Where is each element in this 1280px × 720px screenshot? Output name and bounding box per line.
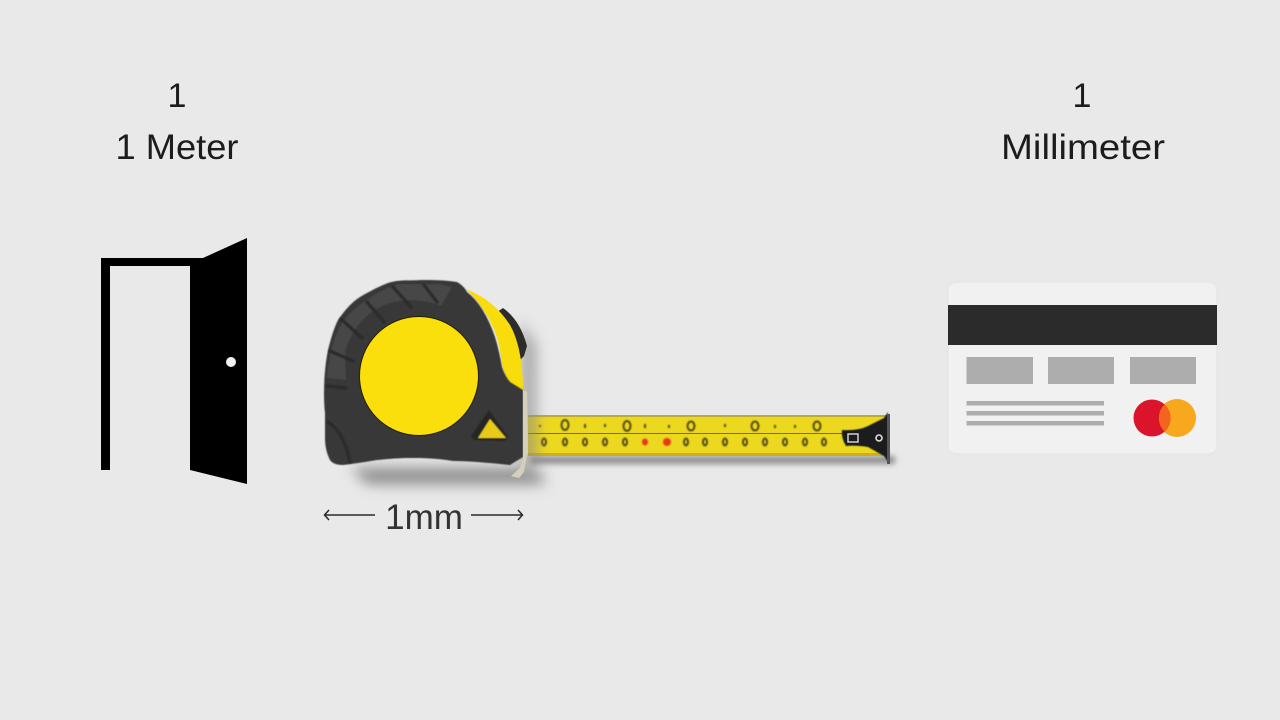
dimension label: 1mm with arrows [324, 498, 522, 537]
right heading: 1 Millimeter: Millimeter [1001, 128, 1165, 167]
right heading: 1 Millimeter [1001, 77, 1165, 167]
grip rim [327, 284, 452, 380]
side button [497, 308, 527, 362]
magnetic stripe [948, 305, 1217, 345]
left heading: 1 Meter [116, 77, 239, 167]
tape blade [528, 412, 895, 464]
dimension label: 1mm with arrows: 1mm [385, 498, 463, 537]
left heading: 1 Meter: 1 [168, 77, 186, 115]
yellow dial [360, 316, 478, 436]
triangle badge [471, 410, 508, 441]
yellow crescent [466, 289, 523, 392]
right heading: 1 Millimeter: 1 [1073, 77, 1091, 115]
grey text lines [966, 401, 1104, 426]
card logo [1134, 399, 1196, 437]
tape end hook [842, 412, 888, 462]
icon: credit card [948, 282, 1217, 454]
icon: tape measure [324, 280, 895, 484]
tape hook at case [511, 390, 528, 478]
icon: open door [101, 238, 247, 484]
grip ribs [327, 285, 437, 462]
left heading: 1 Meter: 1 Meter [116, 128, 239, 167]
case body [324, 280, 523, 465]
grey boxes [966, 357, 1196, 384]
tape case shadow [350, 468, 544, 484]
